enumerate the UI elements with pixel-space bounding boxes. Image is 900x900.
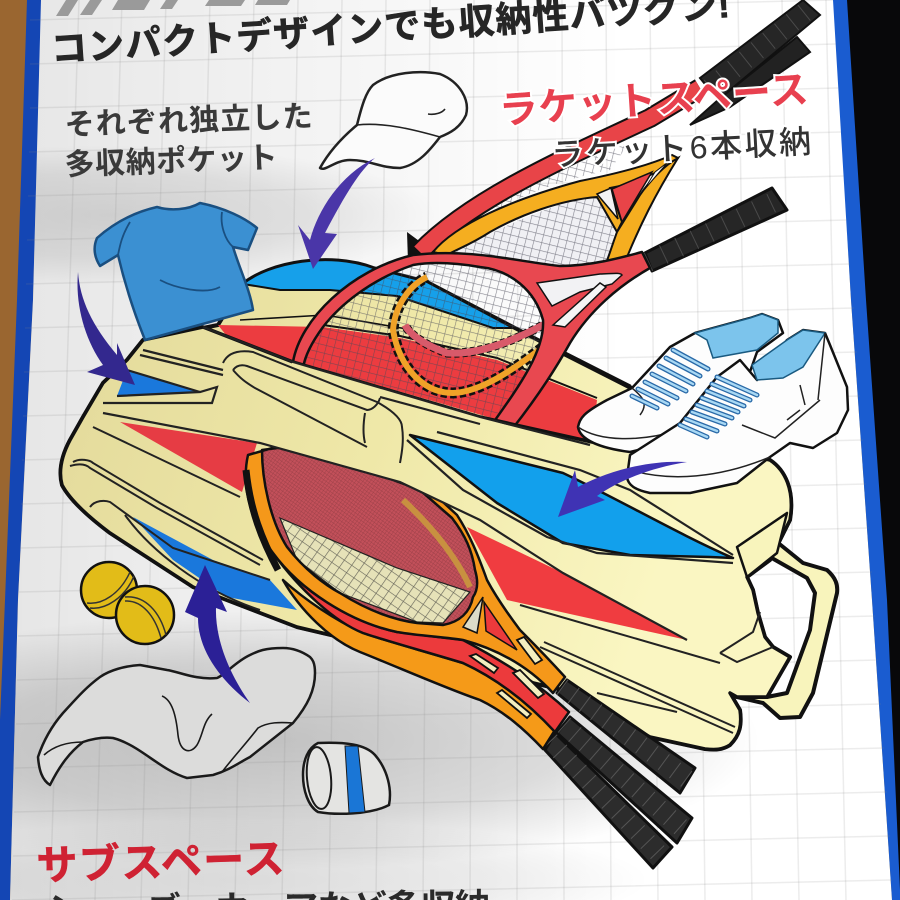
strap (737, 520, 837, 718)
blue bottom pocket (133, 517, 297, 610)
inner orange ring (403, 500, 470, 587)
bag: front body (60, 327, 791, 750)
lower bag seams (70, 427, 773, 733)
head fill (262, 445, 477, 625)
cream string band (280, 518, 470, 623)
arrow: cap to pocket (298, 158, 375, 269)
shirt (95, 203, 257, 340)
blue top pocket (243, 260, 513, 328)
lower orange frame (283, 580, 555, 749)
see-through racket frames behind the strings (393, 277, 600, 393)
orange right arm (595, 158, 678, 292)
blue border left (0, 0, 42, 900)
right end tab (737, 513, 787, 577)
blue border right (832, 0, 900, 900)
wristband (303, 743, 390, 814)
big blue pocket (410, 435, 733, 558)
front shoe (627, 330, 848, 493)
red left compartment (120, 422, 257, 492)
label: independent pockets: 多収納ポケット (64, 142, 278, 182)
red throat triangle (612, 172, 652, 222)
arrow: towel to pocket (185, 565, 250, 703)
label: independent pockets (64, 100, 313, 182)
red middle compartment (467, 527, 687, 640)
cut-off grey logotype at top edge (56, 0, 290, 16)
back shoe (578, 314, 783, 452)
racket space subtext: ラケット6本収納 (550, 123, 812, 173)
paper shading (10, 0, 708, 900)
blue side pocket (117, 370, 200, 396)
sub space heading: サブスペース (36, 836, 285, 889)
bag: back layers (60, 260, 837, 750)
cap (320, 72, 467, 169)
top orange racket (433, 155, 678, 292)
white slit (644, 162, 668, 190)
bag silhouette (60, 260, 791, 750)
towel (38, 648, 315, 785)
red top compartment (218, 325, 597, 442)
front orange frame (246, 440, 565, 693)
arrow: shirt to pocket (77, 272, 135, 385)
middle red racket (293, 188, 787, 428)
racket space heading: ラケットスペース (498, 68, 810, 133)
arrow: shoes to pocket (558, 462, 687, 517)
tennis balls (81, 562, 174, 644)
label: independent pockets: それぞれ独立した (64, 100, 313, 142)
throat openings (463, 597, 483, 633)
wood table background (0, 0, 45, 900)
dark background right (835, 0, 900, 900)
middle racket strings (303, 263, 543, 420)
top red racket (407, 88, 700, 262)
orange top arm and yoke (433, 155, 678, 255)
shoes (578, 314, 848, 493)
red frame (273, 553, 569, 732)
bag seams: upper (103, 327, 733, 640)
bag: band over the racket head (240, 362, 733, 640)
grips (557, 680, 695, 793)
top racket grips (690, 0, 820, 125)
black shadow at racket edge (246, 470, 278, 570)
bottom racket stack (246, 440, 695, 868)
handle piece (223, 351, 403, 463)
thick black bag edge (563, 353, 630, 387)
